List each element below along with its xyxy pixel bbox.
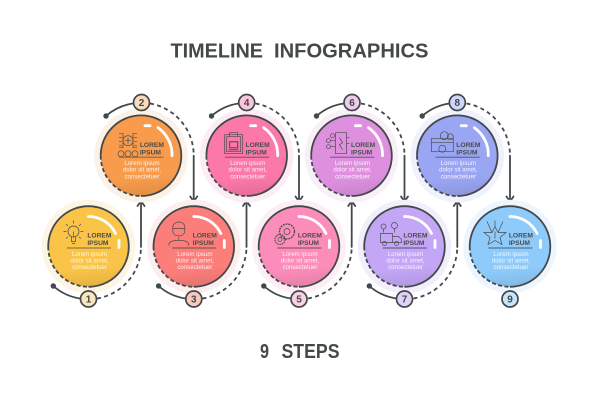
icon: light bulb: [64, 220, 84, 244]
step 9: consectetuer: [494, 264, 528, 271]
step 5: Lorem ipsum: [282, 251, 318, 258]
step 1: [42, 200, 135, 293]
icon: delivery truck with pins: [380, 222, 402, 246]
step 5: LOREM: [298, 233, 322, 240]
step 5: dolor sit amet,: [281, 258, 319, 264]
step 3: IPSUM: [193, 240, 214, 247]
badge 1: [80, 291, 96, 307]
step 4: IPSUM: [245, 149, 267, 156]
icon: medical panel: [118, 134, 138, 157]
connector 5 to 6: [261, 201, 355, 298]
step 4: dolor sit amet,: [229, 167, 267, 174]
step 5: [252, 200, 346, 293]
badge 4: [239, 94, 255, 110]
step 1: consectetuer: [72, 264, 107, 271]
step 8: Lorem ipsum: [441, 160, 476, 167]
icon: star award: [484, 220, 506, 244]
step 7: Lorem ipsum: [388, 251, 423, 258]
subtitle: 9 steps: [260, 341, 340, 363]
badge 9: [502, 291, 518, 307]
step 6: consectetuer: [335, 173, 370, 180]
badge 8: 8: [455, 98, 461, 109]
connector 8 to 9: [420, 104, 514, 202]
subtitle: 9 steps: 9: [260, 341, 269, 363]
connector 6 to 7: [314, 104, 408, 202]
title: [170, 40, 428, 62]
badge 8: [449, 94, 465, 110]
badge 2: [134, 94, 150, 110]
step 9: IPSUM: [509, 240, 530, 247]
step 3: consectetuer: [177, 264, 212, 271]
badge 5: [291, 291, 307, 307]
icon: smartphone network: [326, 133, 350, 154]
title: TIMELINE: [170, 40, 263, 62]
badge 4: 4: [244, 98, 250, 109]
step 2: LOREM: [140, 142, 164, 149]
icon: money and coins: [431, 132, 453, 152]
step 1: IPSUM: [87, 240, 109, 247]
badge 9: 9: [507, 295, 513, 306]
step 6: Lorem ipsum: [335, 160, 370, 167]
step 3: [147, 200, 241, 293]
connector 4 to 5: [209, 104, 302, 202]
step 2: dolor sit amet,: [123, 167, 161, 174]
step 2: consectetuer: [125, 173, 159, 180]
step 8: dolor sit amet,: [439, 167, 478, 174]
step 6: IPSUM: [351, 149, 373, 156]
step 2: IPSUM: [140, 149, 161, 156]
connector 3 to 4: [156, 201, 250, 298]
step 9: [463, 200, 557, 293]
icon: person with glasses: [169, 222, 189, 246]
badge 2: 2: [139, 98, 145, 109]
connector 7 to 8: [367, 201, 461, 298]
step 3: LOREM: [193, 233, 217, 240]
step 9: LOREM: [509, 233, 533, 240]
badge 5: 5: [296, 295, 302, 306]
badge 6: [344, 94, 360, 110]
title: INFOGRAPHICS: [274, 40, 428, 62]
badge 7: [396, 291, 412, 307]
step 7: [358, 200, 451, 293]
step 5: IPSUM: [298, 240, 319, 247]
step 7: IPSUM: [403, 240, 425, 247]
step 7: LOREM: [403, 233, 428, 240]
badge 3: [186, 291, 202, 307]
connector 2 to 3: [103, 104, 197, 202]
step 8: LOREM: [456, 142, 481, 149]
step 8: IPSUM: [456, 149, 478, 156]
step 6: dolor sit amet,: [333, 167, 372, 174]
step 6: LOREM: [351, 142, 376, 149]
step 7: dolor sit amet,: [386, 258, 425, 264]
step 9: dolor sit amet,: [492, 258, 530, 264]
step 7: consectetuer: [388, 264, 423, 271]
step 4: Lorem ipsum: [230, 160, 265, 167]
badge 7: 7: [402, 295, 408, 306]
step 1: Lorem ipsum: [72, 251, 107, 258]
step 3: dolor sit amet,: [176, 258, 214, 264]
step 1: dolor sit amet,: [70, 258, 109, 264]
step 4: consectetuer: [230, 173, 265, 180]
badge 1: 1: [86, 295, 92, 306]
step 2: Lorem ipsum: [124, 160, 160, 167]
subtitle: 9 steps: STEPS: [282, 341, 340, 363]
step 5: consectetuer: [283, 264, 317, 271]
icon: gears: [275, 224, 294, 244]
connector 1 to 2: [51, 201, 144, 298]
step 1: LOREM: [87, 233, 112, 240]
step 4: LOREM: [245, 142, 270, 149]
step 2: [94, 109, 188, 202]
badge 6: 6: [349, 98, 355, 109]
step 6: [305, 109, 398, 202]
step 9: Lorem ipsum: [493, 251, 529, 258]
step 4: [200, 109, 294, 202]
step 8: [410, 109, 504, 202]
step 3: Lorem ipsum: [177, 251, 212, 258]
badge 3: 3: [191, 295, 197, 306]
icon: clipboard: [225, 133, 243, 154]
step 8: consectetuer: [441, 173, 476, 180]
